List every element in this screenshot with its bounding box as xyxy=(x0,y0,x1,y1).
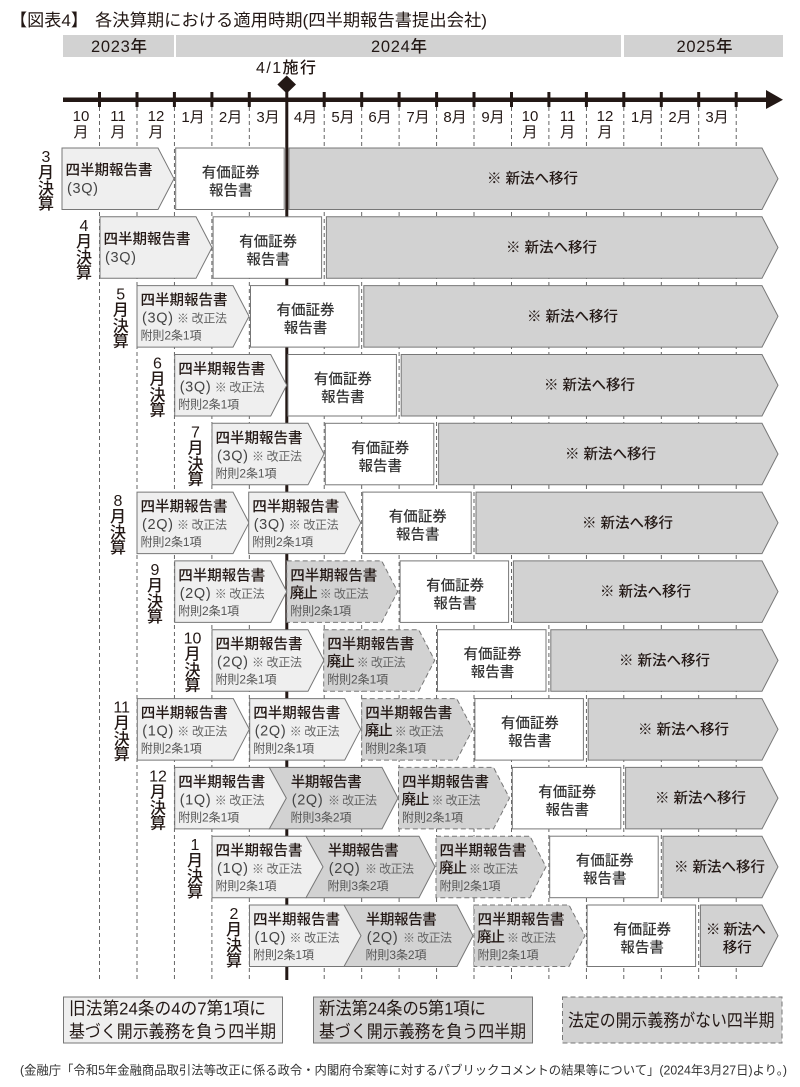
securities report box: 報告書 xyxy=(246,251,290,268)
securities report box: 有価証券 xyxy=(613,922,672,938)
new law arrow xyxy=(626,767,778,829)
new law arrow xyxy=(700,905,778,966)
quarterly report arrow: 四半期報告書 xyxy=(178,361,265,378)
new law arrow xyxy=(326,217,778,278)
fiscal label: 12 xyxy=(149,768,167,785)
quarterly report arrow 2Q: 四半期報告書 xyxy=(253,705,340,722)
abolished quarterly report arrow xyxy=(362,699,473,760)
abolished quarterly report arrow xyxy=(398,767,510,829)
quarterly report arrow 1Q: ※ 改正法 xyxy=(177,724,227,739)
securities report box: 報告書 xyxy=(546,802,589,819)
fiscal label: 月 xyxy=(76,234,92,251)
new law arrow xyxy=(513,561,778,622)
fiscal label: 決 xyxy=(113,318,129,336)
fiscal label: 算 xyxy=(38,194,54,213)
quarterly report arrow 2Q: ※ 改正法 xyxy=(177,517,227,532)
fiscal label: 算 xyxy=(187,882,203,901)
quarterly report arrow 1Q: ※ 改正法 xyxy=(215,792,265,807)
quarterly report arrow 2Q: 附則2条1項 xyxy=(178,604,239,618)
abolished quarterly report arrow xyxy=(436,836,546,898)
month labels: 11 xyxy=(110,108,126,125)
quarterly report arrow: (3Q) xyxy=(180,380,211,396)
month labels: 3月 xyxy=(705,109,729,126)
abolished quarterly report arrow: 附則2条1項 xyxy=(290,604,351,618)
fiscal label: 月 xyxy=(226,922,242,939)
quarterly report arrow 1Q: 四半期報告書 xyxy=(178,774,265,791)
securities report box xyxy=(213,217,322,278)
half-year report arrow: (2Q) xyxy=(367,930,398,946)
fiscal label xyxy=(76,218,92,282)
fiscal label xyxy=(184,631,202,695)
quarterly report arrow 1Q: (1Q) xyxy=(217,861,248,877)
fiscal label: 月 xyxy=(149,372,166,388)
new law arrow xyxy=(439,423,778,485)
new law arrow xyxy=(289,148,778,210)
fiscal label xyxy=(113,700,130,764)
quarterly report arrow: 四半期報告書 xyxy=(104,231,190,248)
fiscal label: 1 xyxy=(191,837,200,854)
securities report box xyxy=(587,905,696,966)
securities report box: 報告書 xyxy=(396,527,439,544)
row: 4月決算 xyxy=(76,217,778,282)
securities report box: 有価証券 xyxy=(501,715,559,732)
securities report box xyxy=(438,630,546,691)
abolished quarterly report arrow: 附則2条1項 xyxy=(478,948,538,962)
quarterly report arrow xyxy=(137,286,249,347)
quarterly report arrow 3Q xyxy=(249,492,361,554)
fiscal label: 月 xyxy=(147,578,163,595)
new law arrow: ※ 新法へ移行 xyxy=(655,790,746,807)
quarterly report arrow 2Q xyxy=(250,699,361,760)
half-year report arrow: ※ 改正法 xyxy=(365,861,414,876)
new law arrow: ※ 新法へ移行 xyxy=(487,171,578,188)
new law arrow xyxy=(401,354,778,416)
half-year report arrow: (2Q) xyxy=(292,792,323,808)
quarterly report arrow 1Q xyxy=(212,836,323,898)
fiscal label: 7 xyxy=(191,424,200,441)
securities report box xyxy=(475,699,583,760)
quarterly report arrow 2Q: (2Q) xyxy=(180,586,211,602)
fiscal label: 算 xyxy=(113,332,129,351)
quarterly report arrow 2Q: (2Q) xyxy=(255,724,286,740)
title: 各決算期における適用時期(四半期報告書提出会社) xyxy=(95,11,487,30)
quarterly report arrow 3Q: 附則2条1項 xyxy=(252,535,313,549)
quarterly report arrow 1Q: 四半期報告書 xyxy=(216,843,302,860)
quarterly report arrow 1Q: ※ 改正法 xyxy=(252,861,302,876)
half-year report arrow xyxy=(344,905,473,966)
month labels: 10 xyxy=(73,108,89,125)
quarterly report arrow 2Q: 附則2条1項 xyxy=(216,673,276,687)
quarterly report arrow xyxy=(100,217,212,278)
abolished quarterly report arrow: 附則2条1項 xyxy=(365,742,426,756)
fiscal label: 決 xyxy=(147,593,163,611)
fiscal label: 月 xyxy=(38,165,54,182)
quarterly report arrow 1Q: 附則2条1項 xyxy=(141,742,202,756)
quarterly report arrow 2Q xyxy=(175,561,287,622)
half-year report arrow: 附則3条2項 xyxy=(328,879,388,893)
securities report box: 有価証券 xyxy=(389,509,447,526)
fiscal label: 決 xyxy=(187,455,204,473)
fiscal label: 月 xyxy=(114,716,130,733)
fiscal label: 算 xyxy=(150,813,166,832)
quarterly report arrow 2Q: (2Q) xyxy=(217,655,248,671)
quarterly report arrow 1Q xyxy=(250,905,361,966)
new law arrow: ※ 新法へ移行 xyxy=(582,515,673,532)
abolished quarterly report arrow: 廃止 xyxy=(365,722,393,740)
month labels: 1月 xyxy=(181,109,205,126)
securities report box: 報告書 xyxy=(209,182,252,200)
new law arrow: ※ 新法へ移行 xyxy=(527,308,618,325)
quarterly report arrow 3Q: (3Q) xyxy=(254,517,285,533)
enforcement marker: 4/1施行: 4/1施行 xyxy=(256,59,316,77)
new law arrow: ※ 新法へ移行 xyxy=(674,859,765,876)
securities report box xyxy=(250,286,359,347)
new law arrow xyxy=(476,492,778,554)
fiscal label: 8 xyxy=(114,493,123,510)
fiscal label xyxy=(38,149,54,213)
row: 5月決算 xyxy=(113,286,778,351)
quarterly report arrow xyxy=(212,423,324,485)
row: 3月決算 xyxy=(38,148,778,213)
fiscal label xyxy=(226,906,242,970)
month labels: 2月 xyxy=(219,109,242,126)
abolished quarterly report arrow: ※ 改正法 xyxy=(357,655,406,670)
half-year report arrow: 半期報告書 xyxy=(291,774,362,791)
quarterly report arrow 1Q: 附則2条1項 xyxy=(216,879,276,893)
quarterly report arrow 2Q: 四半期報告書 xyxy=(216,636,302,653)
new law arrow: ※ 新法へ移行 xyxy=(544,377,635,394)
new law arrow xyxy=(551,630,778,691)
new law arrow xyxy=(588,699,778,760)
new law arrow xyxy=(364,286,778,347)
abolished quarterly report arrow: ※ 改正法 xyxy=(432,792,480,807)
legend: no statutory disclosure xyxy=(562,997,782,1043)
abolished quarterly report arrow: 廃止 xyxy=(327,653,355,671)
quarterly report arrow 2Q: 附則2条1項 xyxy=(253,742,314,756)
quarterly report arrow 3Q: ※ 改正法 xyxy=(289,517,339,532)
securities report box xyxy=(550,836,658,898)
fiscal label: 算 xyxy=(76,263,92,282)
row: 1月決算 xyxy=(187,836,778,901)
fiscal label: 月 xyxy=(150,784,166,801)
row: 2月決算 xyxy=(226,905,778,970)
legend: no statutory disclosure: 法定の開示義務がない四半期 xyxy=(568,1010,774,1030)
row: 9月決算 xyxy=(147,561,778,626)
timeline axis arrow xyxy=(63,90,783,109)
row: 6月決算 xyxy=(149,354,778,420)
fiscal label: 月 xyxy=(110,509,126,526)
title: 【図表4】 xyxy=(10,11,88,30)
month labels: 7月 xyxy=(406,109,430,126)
quarterly report arrow: (3Q) xyxy=(217,448,248,464)
source note: (金融庁「令和5年金融商品取引法等改正に係る政令・内閣府令案等に対するパブリックコメントの結果等について」(2024年3月27日)より。) xyxy=(20,1062,787,1078)
securities report box: 有価証券 xyxy=(202,164,260,182)
half-year report arrow: (2Q) xyxy=(329,861,360,877)
abolished quarterly report arrow: 廃止 xyxy=(290,584,318,602)
new law arrow: ※ 新法へ移行 xyxy=(565,446,656,463)
securities report box: 有価証券 xyxy=(351,440,410,457)
fiscal label: 11 xyxy=(113,700,130,717)
half-year report arrow: 附則3条2項 xyxy=(366,948,426,962)
fiscal label xyxy=(187,837,203,901)
securities report box: 有価証券 xyxy=(576,853,634,870)
row: 8月決算 xyxy=(110,492,778,557)
year header band: 2025年 xyxy=(676,37,732,56)
row: 11月決算 xyxy=(113,699,778,764)
month labels: 12 xyxy=(148,108,164,125)
fiscal label: 算 xyxy=(226,951,242,970)
securities report box xyxy=(400,561,509,622)
quarterly report arrow: 附則2条1項 xyxy=(140,329,202,343)
securities report box: 有価証券 xyxy=(426,577,485,594)
securities report box xyxy=(288,354,396,416)
quarterly report arrow xyxy=(175,354,287,416)
fiscal label: 算 xyxy=(147,607,163,626)
quarterly report arrow: 附則2条1項 xyxy=(178,398,239,412)
fiscal label: 決 xyxy=(187,868,203,886)
fiscal label xyxy=(149,356,166,420)
securities report box: 有価証券 xyxy=(464,646,522,663)
fiscal label xyxy=(187,424,204,488)
month labels: 3月 xyxy=(256,109,280,126)
half-year report arrow xyxy=(269,767,398,829)
half-year report arrow: 半期報告書 xyxy=(366,912,437,928)
enforcement marker: 4/1施行 xyxy=(256,59,316,94)
row: 10月決算 xyxy=(184,630,778,695)
fiscal label: 決 xyxy=(114,731,130,749)
quarterly report arrow 2Q: 四半期報告書 xyxy=(178,567,265,584)
half-year report arrow: 半期報告書 xyxy=(328,843,399,860)
fiscal label: 月 xyxy=(187,853,203,870)
abolished quarterly report arrow: 附則2条1項 xyxy=(402,810,463,824)
securities report box: 報告書 xyxy=(508,733,552,750)
legend: new law: 新法第24条の5第1項に xyxy=(319,998,486,1018)
row: 12月決算 xyxy=(149,767,778,832)
fiscal label: 算 xyxy=(114,745,130,764)
enforcement line at April 1 xyxy=(285,92,288,980)
quarterly report arrow 1Q: 附則2条1項 xyxy=(178,810,239,824)
fiscal label xyxy=(149,768,167,832)
fiscal label xyxy=(113,287,129,351)
quarterly report arrow 1Q: (1Q) xyxy=(142,724,173,740)
abolished quarterly report arrow: 四半期報告書 xyxy=(402,774,489,791)
quarterly report arrow 1Q: ※ 改正法 xyxy=(290,930,340,945)
half-year report arrow: ※ 改正法 xyxy=(403,930,452,945)
fiscal label xyxy=(147,562,163,626)
new law arrow: 移行 xyxy=(723,940,752,957)
legend: new law xyxy=(314,997,532,1043)
fiscal label: 決 xyxy=(226,937,242,955)
quarterly report arrow: (3Q) xyxy=(67,181,98,197)
quarterly report arrow 2Q: 四半期報告書 xyxy=(140,499,228,516)
abolished quarterly report arrow: ※ 改正法 xyxy=(507,930,556,945)
new law arrow: ※ 新法へ xyxy=(706,922,766,939)
quarterly report arrow: 附則2条1項 xyxy=(216,466,276,480)
abolished quarterly report arrow: 廃止 xyxy=(439,859,467,877)
abolished quarterly report arrow: 廃止 xyxy=(477,928,505,946)
quarterly report arrow 2Q: 附則2条1項 xyxy=(140,535,202,549)
year header band: 2023年 xyxy=(91,37,147,56)
quarterly report arrow: 四半期報告書 xyxy=(216,430,302,447)
abolished quarterly report arrow xyxy=(324,630,435,691)
half-year report arrow: 附則3条2項 xyxy=(290,810,352,824)
fiscal label: 10 xyxy=(184,631,202,648)
fiscal label: 6 xyxy=(153,356,162,372)
fiscal label: 5 xyxy=(116,287,125,304)
legend: old law: 旧法第24条の4の7第1項に xyxy=(69,998,266,1018)
fiscal label: 算 xyxy=(184,676,201,695)
new law arrow: ※ 新法へ移行 xyxy=(619,652,710,669)
quarterly report arrow: (3Q) xyxy=(105,250,136,266)
legend: old law xyxy=(64,997,282,1043)
month labels: 11 xyxy=(560,108,575,125)
abolished quarterly report arrow xyxy=(287,561,398,622)
fiscal label: 月 xyxy=(113,303,129,320)
abolished quarterly report arrow: 廃止 xyxy=(402,790,430,808)
abolished quarterly report arrow: 附則2条1項 xyxy=(440,879,500,893)
fiscal label: 月 xyxy=(184,647,201,664)
quarterly report arrow 2Q: ※ 改正法 xyxy=(290,724,340,739)
quarterly report arrow: ※ 改正法 xyxy=(252,448,302,463)
securities report box xyxy=(363,492,471,554)
fiscal label: 2 xyxy=(230,906,239,923)
fiscal label: 月 xyxy=(187,440,204,457)
half-year report arrow: ※ 改正法 xyxy=(328,792,377,807)
quarterly report arrow xyxy=(62,148,174,210)
fiscal label: 決 xyxy=(38,180,54,198)
quarterly report arrow: (3Q) xyxy=(142,311,173,327)
securities report box: 報告書 xyxy=(284,320,327,337)
quarterly report arrow: ※ 改正法 xyxy=(177,311,227,326)
month labels: 5月 xyxy=(331,109,355,126)
abolished quarterly report arrow: 四半期報告書 xyxy=(327,636,414,653)
securities report box: 報告書 xyxy=(583,871,626,888)
month labels: 月 xyxy=(148,124,164,141)
abolished quarterly report arrow: 四半期報告書 xyxy=(290,567,377,584)
month labels: 月 xyxy=(110,124,126,141)
quarterly report arrow 2Q: ※ 改正法 xyxy=(252,655,302,670)
quarterly report arrow 1Q: 附則2条1項 xyxy=(253,948,314,962)
abolished quarterly report arrow: ※ 改正法 xyxy=(395,724,444,739)
quarterly report arrow 1Q: 四半期報告書 xyxy=(141,705,228,722)
month labels: 10 xyxy=(522,108,538,125)
quarterly report arrow: 四半期報告書 xyxy=(140,292,228,309)
new law arrow: ※ 新法へ移行 xyxy=(638,721,729,738)
month labels: 2月 xyxy=(668,109,692,126)
legend: old law: 基づく開示義務を負う四半期 xyxy=(69,1022,276,1042)
year header band: 2024年 xyxy=(371,37,427,56)
abolished quarterly report arrow: 四半期報告書 xyxy=(365,705,452,722)
month labels: 月 xyxy=(597,124,613,141)
quarterly report arrow 3Q: 四半期報告書 xyxy=(252,499,339,516)
securities report box: 報告書 xyxy=(359,458,402,475)
month labels: 月 xyxy=(560,124,575,141)
securities report box: 報告書 xyxy=(620,940,664,956)
legend: new law: 基づく開示義務を負う四半期 xyxy=(319,1022,526,1042)
fiscal label: 決 xyxy=(110,524,126,542)
quarterly report arrow 1Q xyxy=(175,767,286,829)
abolished quarterly report arrow: 四半期報告書 xyxy=(440,843,526,860)
quarterly report arrow 2Q: (2Q) xyxy=(142,517,173,533)
abolished quarterly report arrow: 四半期報告書 xyxy=(478,912,564,928)
securities report box: 有価証券 xyxy=(538,784,597,801)
fiscal label: 決 xyxy=(150,799,166,817)
securities report box xyxy=(176,148,284,210)
securities report box: 有価証券 xyxy=(276,302,335,319)
new law arrow: ※ 新法へ移行 xyxy=(600,584,691,601)
securities report box: 有価証券 xyxy=(314,371,372,388)
securities report box xyxy=(512,767,621,829)
quarterly report arrow 1Q: 四半期報告書 xyxy=(253,912,340,928)
new law arrow: ※ 新法へ移行 xyxy=(506,240,597,257)
fiscal label: 算 xyxy=(110,538,126,557)
abolished quarterly report arrow xyxy=(474,905,585,966)
securities report box xyxy=(325,423,434,485)
quarterly report arrow 1Q xyxy=(137,699,249,760)
abolished quarterly report arrow: ※ 改正法 xyxy=(320,586,369,601)
quarterly report arrow: ※ 改正法 xyxy=(215,380,265,394)
fiscal label: 決 xyxy=(149,386,166,404)
quarterly report arrow 2Q: ※ 改正法 xyxy=(215,586,265,601)
month labels: 8月 xyxy=(443,109,467,126)
month labels: 6月 xyxy=(368,109,392,126)
quarterly report arrow 1Q: (1Q) xyxy=(254,930,286,946)
quarterly report arrow 1Q: (1Q) xyxy=(180,792,211,808)
securities report box: 有価証券 xyxy=(239,233,298,250)
month labels: 9月 xyxy=(481,109,505,126)
new law arrow xyxy=(663,836,778,898)
quarterly report arrow: 四半期報告書 xyxy=(66,162,152,179)
month labels: 4月 xyxy=(294,109,317,126)
fiscal label xyxy=(110,493,126,557)
fiscal label: 算 xyxy=(149,400,166,420)
month labels: 月 xyxy=(522,124,538,141)
month labels: 1月 xyxy=(631,109,654,126)
half-year report arrow xyxy=(306,836,435,898)
securities report box: 報告書 xyxy=(321,389,365,406)
abolished quarterly report arrow: 附則2条1項 xyxy=(327,673,388,687)
fiscal label: 算 xyxy=(187,469,204,488)
year header band xyxy=(63,35,783,57)
month labels xyxy=(73,108,729,141)
fiscal label: 3 xyxy=(42,149,51,166)
fiscal label: 9 xyxy=(151,562,160,579)
abolished quarterly report arrow: ※ 改正法 xyxy=(469,861,518,876)
securities report box: 報告書 xyxy=(433,595,477,612)
month labels: 月 xyxy=(73,124,89,141)
row: 7月決算 xyxy=(187,423,778,488)
quarterly report arrow 2Q xyxy=(212,630,324,691)
fiscal label: 決 xyxy=(76,249,92,267)
fiscal label: 決 xyxy=(184,662,201,680)
securities report box: 報告書 xyxy=(471,664,514,681)
quarterly report arrow 2Q xyxy=(137,492,249,554)
month labels: 12 xyxy=(597,108,613,125)
fiscal label: 4 xyxy=(80,218,89,235)
